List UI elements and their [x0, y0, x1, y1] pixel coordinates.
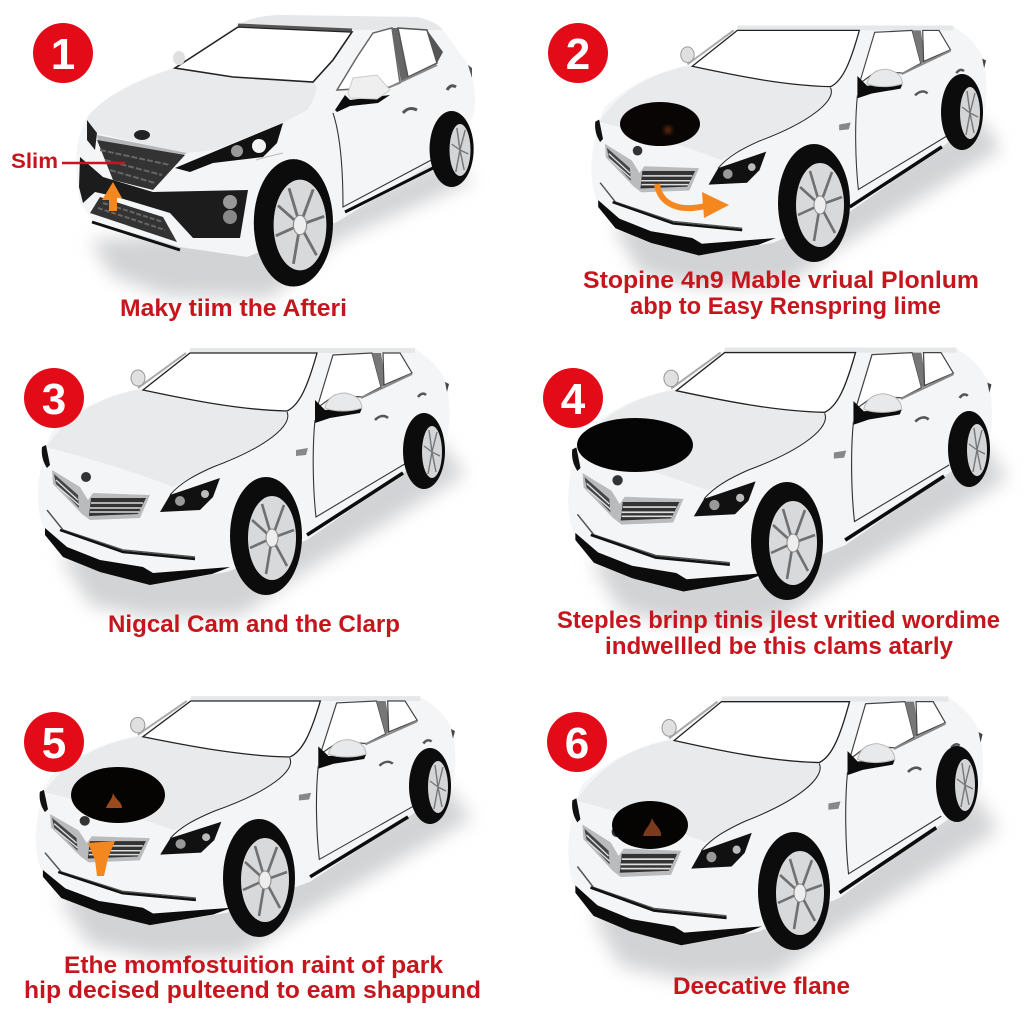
panel 2: sedan with hood hole and orange arrow [548, 23, 1001, 320]
orange drip [88, 841, 115, 876]
badge 2: 2 [566, 30, 590, 79]
badge 3 [24, 368, 84, 428]
badge 1: 1 [51, 30, 75, 79]
car 5 illustration [36, 696, 471, 957]
panel 6: sedan with small flame [547, 696, 999, 1000]
badge 6 [547, 712, 607, 772]
caption 5: Ethe momfostuition raint of park [64, 952, 444, 979]
black hole with flame [71, 767, 165, 823]
caption 2: Stopine 4n9 Mable vriual Plonlum [583, 267, 979, 294]
caption 4: Steples brinp tinis jlest vritied wordime [557, 607, 1000, 634]
orange curved arrow [657, 184, 729, 218]
badge 5 [24, 712, 84, 772]
caption 6: Deecative flane [673, 973, 850, 1000]
black hole with flame [612, 801, 688, 849]
panel 4: sedan with large hood hole [543, 347, 1008, 660]
caption 4: indwellled be this clams atarly [605, 633, 954, 660]
car 2 illustration [591, 26, 1001, 287]
car 1 front wheel [254, 159, 333, 287]
badge 5: 5 [42, 719, 66, 768]
orange arrow [102, 182, 122, 211]
caption 2: abp to Easy Renspring lime [630, 293, 941, 320]
badge 3: 3 [42, 375, 66, 424]
badge 2 [548, 23, 608, 83]
panel 3: plain sedan [24, 348, 465, 638]
caption 2 [583, 267, 979, 320]
badge 4: 4 [561, 375, 586, 424]
slim label: Slim [11, 150, 58, 173]
caption 3: Nigcal Cam and the Clarp [108, 611, 400, 638]
badge 1 [33, 23, 93, 83]
leader line [62, 162, 125, 164]
car 1 body [76, 15, 475, 257]
front grille and lower bumper [79, 120, 248, 250]
car 3 illustration [38, 348, 465, 618]
panel 5: sedan with flame and orange drip [24, 696, 481, 1004]
badge 4 [543, 368, 603, 428]
car 1 rear wheel [430, 111, 474, 187]
headlight [175, 123, 283, 172]
car 6 illustration [568, 696, 999, 980]
car 1 ground shadow [90, 160, 475, 298]
black hole in hood [577, 418, 693, 472]
caption 4 [557, 607, 1000, 660]
caption 1: Maky tiim the Afteri [120, 295, 347, 322]
badge 6: 6 [565, 719, 589, 768]
car 4 illustration [568, 347, 1008, 626]
caption 5 [24, 952, 481, 1004]
black hole in hood [620, 102, 700, 146]
panel 1: hatchback with slim grille label [11, 15, 475, 322]
caption 5: hip decised pulteend to eam shappund [24, 977, 481, 1004]
